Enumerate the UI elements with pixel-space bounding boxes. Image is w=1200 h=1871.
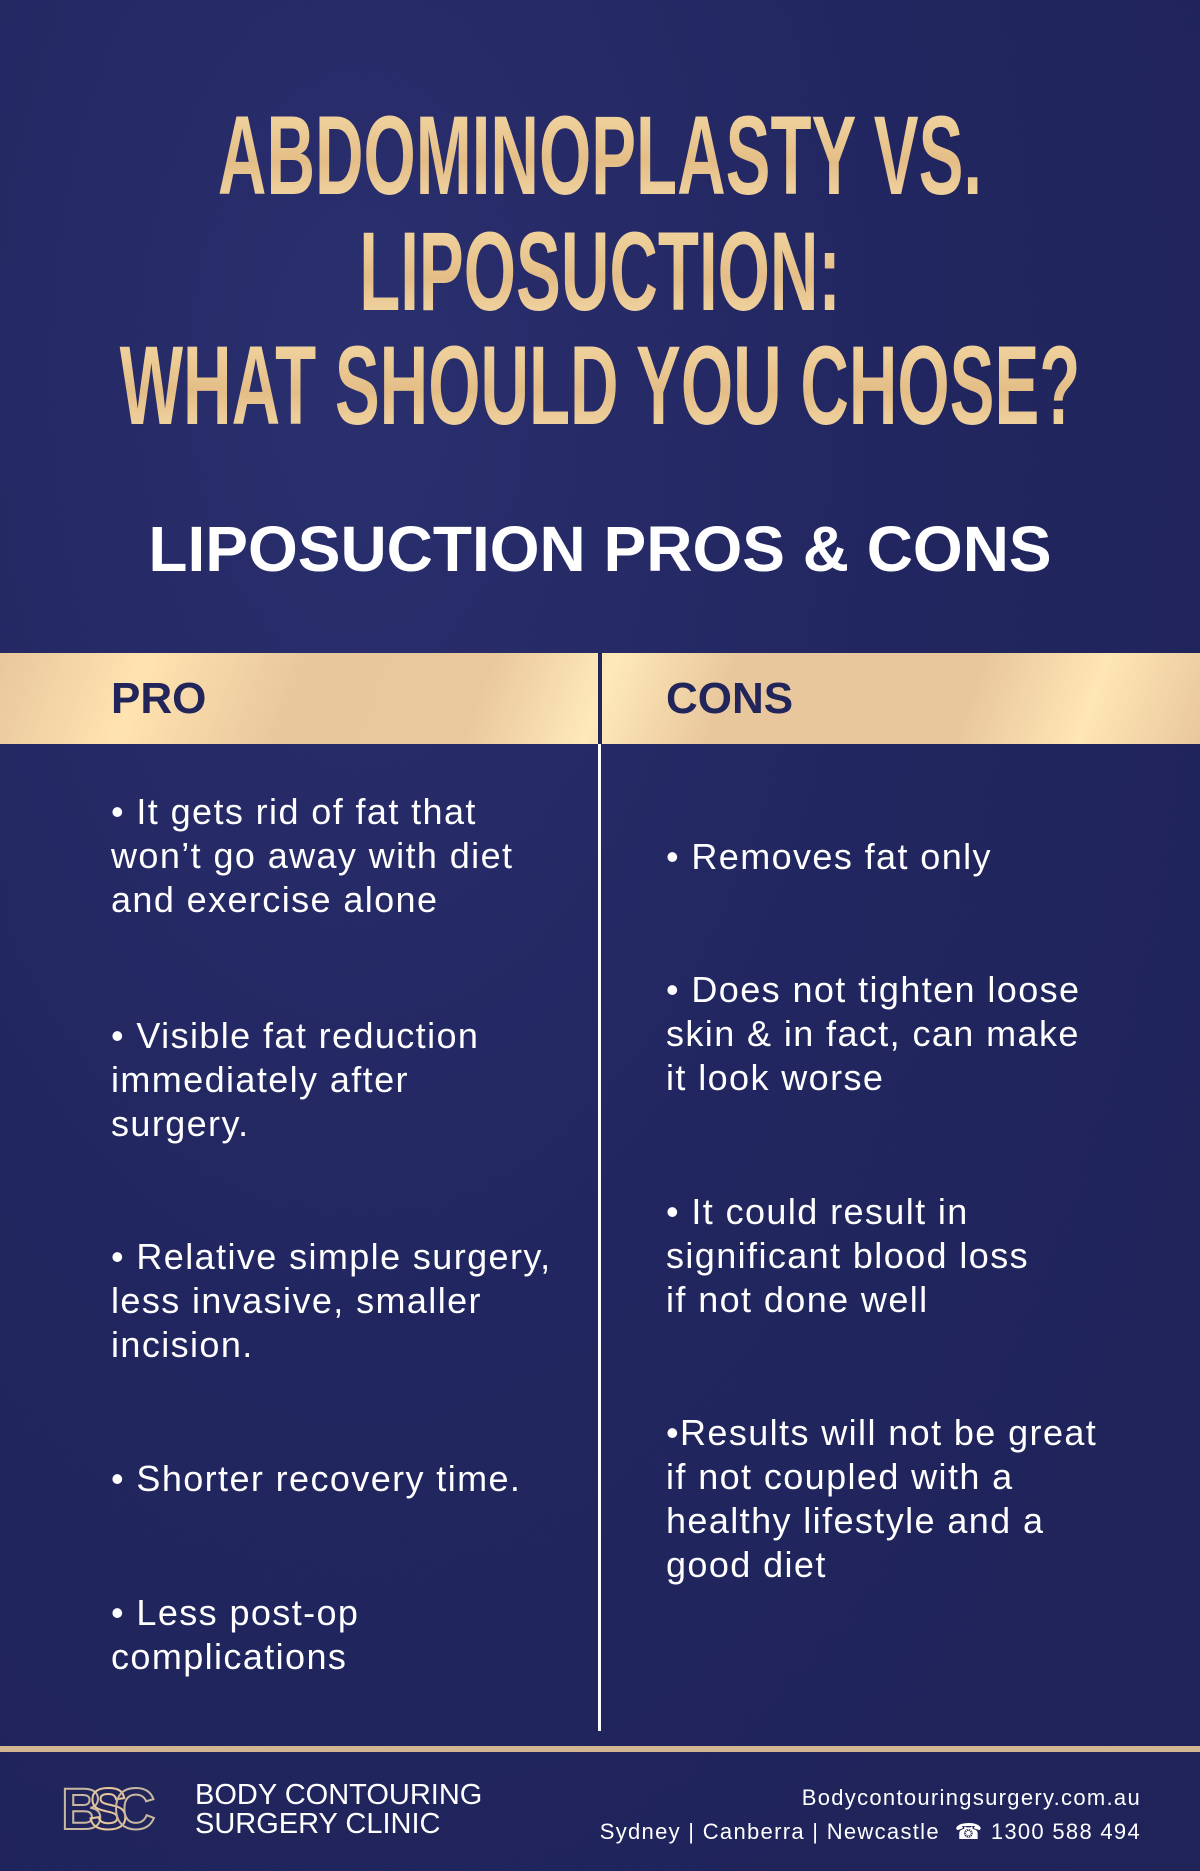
pro item 5: complications: [111, 1636, 347, 1677]
con item 4: [666, 1412, 1097, 1585]
pro item 2: • Visible fat reduction: [111, 1015, 479, 1056]
pro item 3: • Relative simple surgery,: [111, 1236, 551, 1277]
pro item 1: • It gets rid of fat that: [111, 791, 477, 832]
con item 1: • Removes fat only: [666, 836, 992, 877]
pro item 2: [111, 1015, 479, 1144]
pro item 1: and exercise alone: [111, 879, 438, 920]
con item 3: if not done well: [666, 1279, 929, 1320]
con item 3: significant blood loss: [666, 1235, 1029, 1276]
con item 3: • It could result in: [666, 1191, 969, 1232]
pro item 3: [111, 1236, 551, 1365]
subtitle: LIPOSUCTION PROS & CONS: [148, 513, 1052, 585]
brand name: BODY CONTOURING: [195, 1779, 482, 1811]
con item 2: • Does not tighten loose: [666, 969, 1080, 1010]
con item 2: [666, 969, 1080, 1098]
contact info: Bodycontouringsurgery.com.au: [802, 1785, 1141, 1810]
header bar: [0, 653, 1200, 744]
pro item 1: [111, 791, 513, 920]
contact info: [600, 1785, 1141, 1844]
con item 2: it look worse: [666, 1057, 884, 1098]
pro item 3: incision.: [111, 1324, 254, 1365]
con item 4: if not coupled with a: [666, 1456, 1014, 1497]
pro item 2: immediately after: [111, 1059, 409, 1100]
heading: pro: PRO: [111, 674, 206, 723]
footer logo: [64, 1779, 482, 1840]
con item 4: •Results will not be great: [666, 1412, 1097, 1453]
pro item 5: [111, 1592, 359, 1677]
pro item 2: surgery.: [111, 1103, 250, 1144]
title: WHAT SHOULD YOU CHOSE?: [120, 323, 1080, 448]
pro item 3: less invasive, smaller: [111, 1280, 482, 1321]
panel: cons: [666, 836, 1097, 1585]
con item 4: healthy lifestyle and a: [666, 1500, 1044, 1541]
contact info: Sydney | Canberra | Newcastle ☎ 1300 588 494: [600, 1819, 1141, 1844]
panel: pros: [111, 791, 551, 1677]
con item 4: good diet: [666, 1544, 827, 1585]
brand name: [195, 1779, 482, 1840]
title: LIPOSUCTION:: [359, 209, 841, 334]
heading: cons: CONS: [666, 674, 793, 723]
con item 3: [666, 1191, 1029, 1320]
con item 2: skin & in fact, can make: [666, 1013, 1080, 1054]
pro item 5: • Less post-op: [111, 1592, 359, 1633]
pro item 4: • Shorter recovery time.: [111, 1458, 521, 1499]
title: ABDOMINOPLASTY VS.: [218, 93, 982, 218]
brand name: SURGERY CLINIC: [195, 1808, 440, 1840]
title: [120, 93, 1080, 448]
pro item 1: won’t go away with diet: [111, 835, 513, 876]
